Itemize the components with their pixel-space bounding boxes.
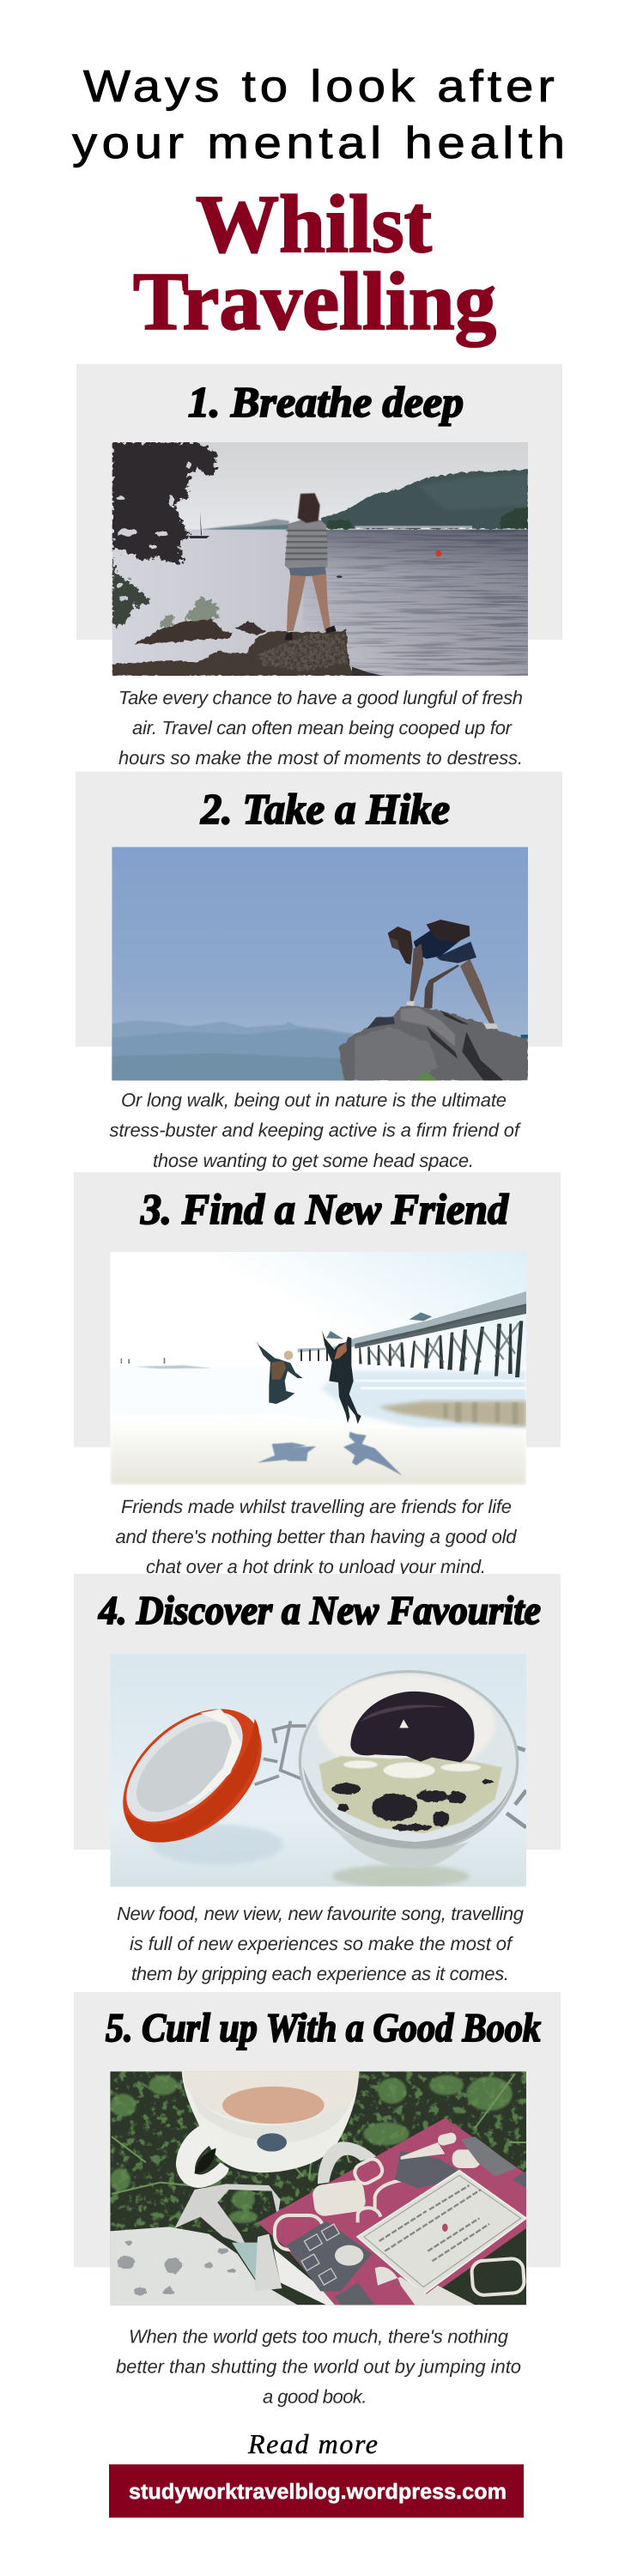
panel: 5. curl up with a good book (74, 1992, 561, 2408)
caption: a good book. (263, 2385, 367, 2408)
caption: air. Travel can often mean being cooped up for (132, 717, 513, 738)
panel: 1. breathe deep (76, 364, 562, 769)
heading: 1. Breathe deep (188, 378, 464, 426)
caption: is full of new experiences so make the most of (130, 1933, 514, 1954)
photo: woman looking over a lake (112, 442, 528, 676)
photo: tea, book and bag on grass (110, 2071, 526, 2305)
panel background (74, 1574, 561, 1850)
caption: New food, new view, new favourite song, travelling (117, 1903, 525, 1924)
floral bag (110, 2227, 298, 2305)
photo: dessert in a glass jar (98, 1654, 526, 1887)
book (258, 2118, 526, 2305)
photo: hiker on a rock (112, 847, 528, 1080)
caption: better than shutting the world out by jumping into (116, 2356, 521, 2377)
photo: friends jumping on the beach (110, 1252, 526, 1485)
caption: chat over a hot drink to unload your mind. (146, 1556, 486, 1577)
heading: 2. Take a Hike (200, 785, 450, 833)
cup (176, 2071, 359, 2188)
caption (117, 1903, 525, 1984)
jar (300, 1672, 518, 1868)
heading: whilst travelling: Travelling (133, 255, 496, 348)
grass (110, 2071, 526, 2232)
panel background (74, 1992, 561, 2267)
caption: Friends made whilst travelling are friends for life (121, 1496, 512, 1517)
caption: When the world gets too much, there's nothing (129, 2325, 509, 2348)
heading: whilst travelling (133, 178, 496, 348)
heading: 4. Discover a New Favourite (98, 1589, 541, 1633)
caption: and there's nothing better than having a good old (115, 1526, 517, 1547)
caption (115, 1496, 517, 1577)
lid (123, 1709, 262, 1843)
caption: Or long walk, being out in nature is the ultimate (121, 1089, 507, 1111)
heading: 5. Curl up With a Good Book (106, 2006, 541, 2050)
caption (116, 2325, 521, 2408)
title (72, 62, 565, 348)
caption (110, 1089, 522, 1171)
heading: ways to look after your mental health (72, 62, 565, 168)
panel: 4. discover a new favourite (74, 1574, 561, 1984)
panel: 2. take a hike (76, 771, 562, 1171)
caption (118, 687, 523, 769)
read more label: Read more (247, 2428, 378, 2459)
panel: 3. find a new friend (74, 1172, 561, 1577)
caption: stress-buster and keeping active is a firm friend of (110, 1120, 522, 1140)
caption: hours so make the most of moments to destress. (118, 747, 523, 769)
heading: whilst travelling: Whilst (196, 178, 432, 270)
panel background (76, 364, 562, 640)
heading: ways to look after your mental health: Ways to look after (83, 62, 555, 112)
tree foliage (112, 442, 219, 631)
caption: those wanting to get some head space. (153, 1150, 474, 1171)
link banner (109, 2464, 524, 2518)
panel background (74, 1172, 561, 1448)
heading: 3. Find a New Friend (140, 1185, 509, 1233)
panel background (76, 771, 562, 1047)
caption: them by gripping each experience as it comes. (131, 1963, 509, 1984)
heading: ways to look after your mental health: your mental health (72, 118, 565, 168)
caption: Take every chance to have a good lungful of fresh (118, 687, 523, 708)
link banner: studyworktravelblog.wordpress.com (129, 2480, 507, 2504)
